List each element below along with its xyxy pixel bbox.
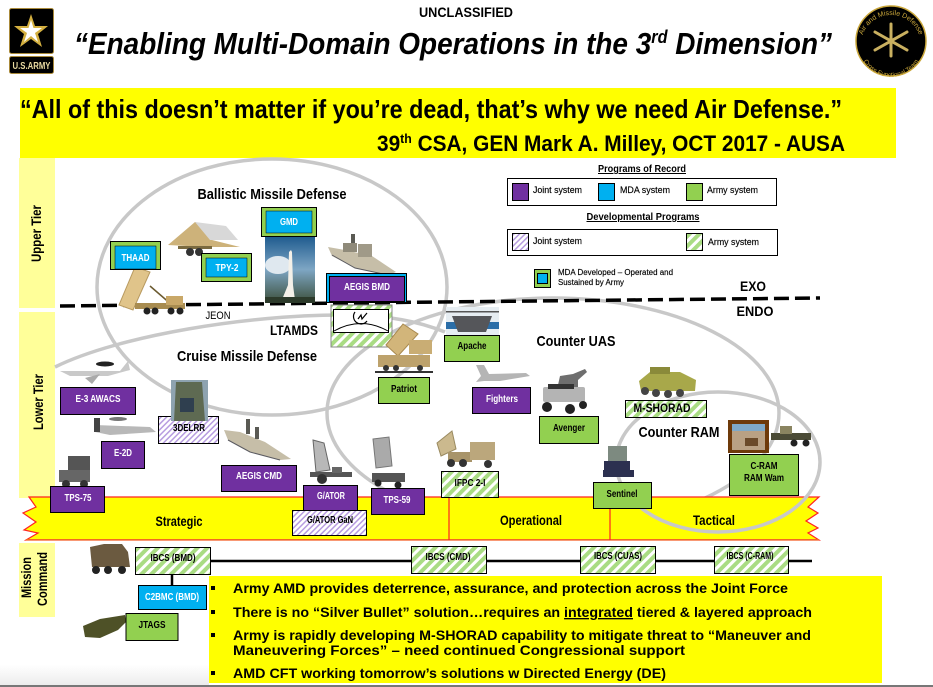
panel: lower tier label: [19, 312, 55, 498]
icon: U.S. Army logo: U.S.ARMY: [12, 61, 51, 72]
title: “Enabling Multi-Domain Operations in the 3: [74, 26, 715, 61]
echelon band: Tactical: [693, 512, 735, 528]
icon: GMD launch photo: [265, 236, 315, 303]
quote banner: th: [400, 131, 412, 146]
icon: TPS-59 radar: [372, 437, 405, 488]
E-3 AWACS box: [60, 388, 136, 414]
legend: MDA developed: Sustained by Army: [558, 278, 624, 287]
Fighters box: [472, 388, 530, 414]
classification marking: UNCLASSIFIED: [419, 4, 513, 20]
legend: programs of record: MDA system: [620, 185, 670, 196]
C2BMC box: [138, 586, 206, 610]
panel: mission command label: [18, 543, 55, 617]
icon: fighter jet: [476, 365, 530, 382]
icon: Air and Missile Defense badge: Air and Missile Defense: [859, 10, 922, 35]
IBCS CMD box: [412, 546, 486, 574]
panel: mission command label: Mission: [18, 557, 34, 598]
quote banner: 39: [377, 131, 401, 156]
IBCS CMD box: IBCS (CMD): [426, 551, 470, 563]
icon: E-3 AWACS aircraft: [60, 361, 130, 384]
label: LTAMDS: LTAMDS: [270, 322, 318, 338]
counter UAS ellipse: [327, 298, 779, 528]
key points panel: AMD CFT working tomorrow’s solutions w Directed Energy (DE): [233, 666, 666, 681]
icon: Patriot launcher: [375, 324, 433, 373]
Fighters box: Fighters: [486, 393, 518, 405]
icon: Avenger vehicle: [542, 369, 587, 414]
TPS-75 box: TPS-75: [64, 492, 92, 504]
icon: U.S. Army logo: [10, 8, 54, 74]
legend: MDA developed: MDA Developed – Operated and: [558, 268, 673, 277]
heading: cruise missile defense: Cruise Missile Defense: [177, 348, 317, 365]
echelon band: Operational: [500, 512, 562, 528]
icon: E-2D aircraft: [94, 417, 156, 435]
legend: MDA developed: [534, 268, 673, 288]
E-2D box: [102, 442, 144, 468]
G/ATOR GaN box: G/ATOR GaN: [307, 514, 353, 526]
IBCS CUAS box: [580, 546, 656, 574]
exo/endo boundary: [60, 298, 820, 306]
icon: Air and Missile Defense badge: Cross Functional Team: [864, 60, 918, 77]
icon: 3DELRR radar photo: [171, 380, 208, 421]
TPS-59 box: TPS-59: [384, 494, 411, 506]
legend: developmental programs: Army system: [708, 237, 759, 248]
IBCS CUAS box: IBCS (CUAS): [594, 550, 642, 562]
legend: programs of record: Programs of Record: [598, 164, 686, 175]
IBCS C-RAM box: [714, 546, 788, 574]
label: ENDO: ENDO: [736, 303, 774, 319]
TPS-75 box: [50, 486, 104, 512]
cruise missile defense arc: [55, 315, 445, 367]
Apache box: Apache: [458, 340, 487, 352]
ballistic missile defense ellipse: [97, 159, 447, 415]
Avenger box: [540, 416, 598, 444]
icon: C-RAM photo: [728, 420, 769, 453]
LTAMDS box: [331, 305, 392, 347]
AEGIS CMD box: AEGIS CMD: [236, 470, 282, 482]
G/ATOR box: G/ATOR: [317, 490, 345, 502]
AEGIS BMD box: [326, 274, 406, 302]
icon: AEGIS ship BMD: [328, 234, 396, 275]
AEGIS BMD box: AEGIS BMD: [344, 281, 390, 293]
Sentinel box: [594, 482, 652, 508]
key points panel: Maneuvering Forces” – need continued Congressional support: [233, 643, 686, 658]
TPS-59 box: [372, 488, 424, 514]
heading: ballistic missile defense: Ballistic Missile Defense: [198, 186, 346, 203]
THAAD box: [110, 242, 160, 270]
quote banner: [20, 88, 896, 158]
panel: lower tier label: Lower Tier: [30, 374, 46, 430]
Sentinel box: Sentinel: [606, 488, 638, 500]
title: rd: [651, 27, 668, 47]
3DELRR box: 3DELRR: [173, 422, 205, 434]
GMD box: GMD: [280, 216, 298, 228]
E-2D box: E-2D: [114, 447, 132, 459]
IBCS BMD box: IBCS (BMD): [150, 552, 196, 564]
key points panel: Army is rapidly developing M-SHORAD capability to mitigate threat to “Maneuver and: [233, 628, 811, 643]
Avenger box: Avenger: [553, 422, 585, 434]
C-RAM box: [730, 454, 798, 496]
icon: IBCS truck: [90, 544, 130, 574]
TPY-2 box: TPY-2: [216, 262, 239, 274]
heading: counter UAS: Counter UAS: [536, 333, 616, 350]
title: Dimension”: [667, 26, 832, 61]
C-RAM box: C-RAM: [750, 460, 778, 472]
bottom shadow: [0, 665, 209, 685]
IBCS C-RAM box: IBCS (C-RAM): [726, 550, 774, 562]
icon: G/ATOR radar: [310, 440, 352, 484]
icon: THAAD launcher: [119, 267, 185, 314]
GMD box: [262, 208, 316, 236]
icon: TPY-2 radar: [168, 222, 240, 256]
Patriot box: Patriot: [391, 383, 417, 395]
panel: mission command label: Command: [34, 552, 50, 606]
G/ATOR GaN box: [292, 510, 366, 536]
mission command network line: [172, 561, 812, 586]
E-3 AWACS box: E-3 AWACS: [76, 393, 120, 405]
JTAGS box: JTAGS: [138, 619, 166, 631]
label: JEON: JEON: [206, 310, 231, 322]
legend: developmental programs: Developmental Programs: [586, 212, 700, 223]
AEGIS CMD box: [222, 466, 296, 492]
Patriot box: [378, 378, 430, 404]
panel: upper tier label: Upper Tier: [28, 205, 44, 262]
legend: programs of record: Army system: [707, 185, 758, 196]
counter RAM ellipse: [616, 392, 820, 532]
icon: AEGIS ship CMD: [224, 419, 291, 460]
icon: Air and Missile Defense badge: [855, 5, 927, 77]
icon: Stryker M-SHORAD: [639, 367, 696, 398]
G/ATOR box: [304, 486, 358, 512]
heading: counter RAM: Counter RAM: [638, 424, 720, 441]
legend: developmental programs: [508, 212, 778, 256]
label: EXO: EXO: [740, 278, 766, 294]
icon: JTAGS vehicle: [83, 615, 126, 638]
legend: programs of record: Joint system: [533, 185, 582, 196]
echelon band: [23, 497, 819, 540]
key points panel: Army AMD provides deterrence, assurance, and protection across the Joint Force: [233, 581, 789, 596]
icon: Sentinel radar: [603, 446, 634, 477]
JTAGS box: [126, 614, 178, 640]
icon: Apache photo: [446, 307, 499, 335]
icon: TPS-75 radar: [59, 456, 90, 488]
quote banner: CSA, GEN Mark A. Milley, OCT 2017 - AUSA: [412, 131, 845, 156]
C2BMC box: C2BMC (BMD): [145, 591, 199, 603]
Apache box: [444, 336, 500, 362]
legend: developmental programs: Joint system: [533, 236, 582, 247]
M-SHORAD box: [626, 400, 706, 418]
icon: IFPC launcher: [437, 431, 495, 468]
key points panel: [209, 576, 882, 683]
panel: upper tier label: [19, 158, 55, 308]
key points panel: There is no “Silver Bullet” solution…requires an integrated tiered & layered approach: [233, 605, 812, 620]
icon: C-RAM gun trailer: [771, 426, 811, 446]
3DELRR box: [158, 416, 218, 444]
THAAD box: THAAD: [122, 252, 150, 264]
IBCS BMD box: [136, 548, 210, 574]
C-RAM box: RAM Wam: [744, 472, 784, 484]
echelon band: Strategic: [156, 513, 203, 529]
M-SHORAD box: M-SHORAD: [634, 401, 691, 415]
quote banner: “All of this doesn’t matter if you’re dead, that’s why we need Air Defense.”: [20, 94, 842, 124]
IFPC box: IFPC 2-I: [454, 477, 486, 489]
IFPC box: [442, 472, 498, 498]
legend: programs of record: [508, 164, 776, 206]
TPY-2 box: [202, 254, 252, 282]
